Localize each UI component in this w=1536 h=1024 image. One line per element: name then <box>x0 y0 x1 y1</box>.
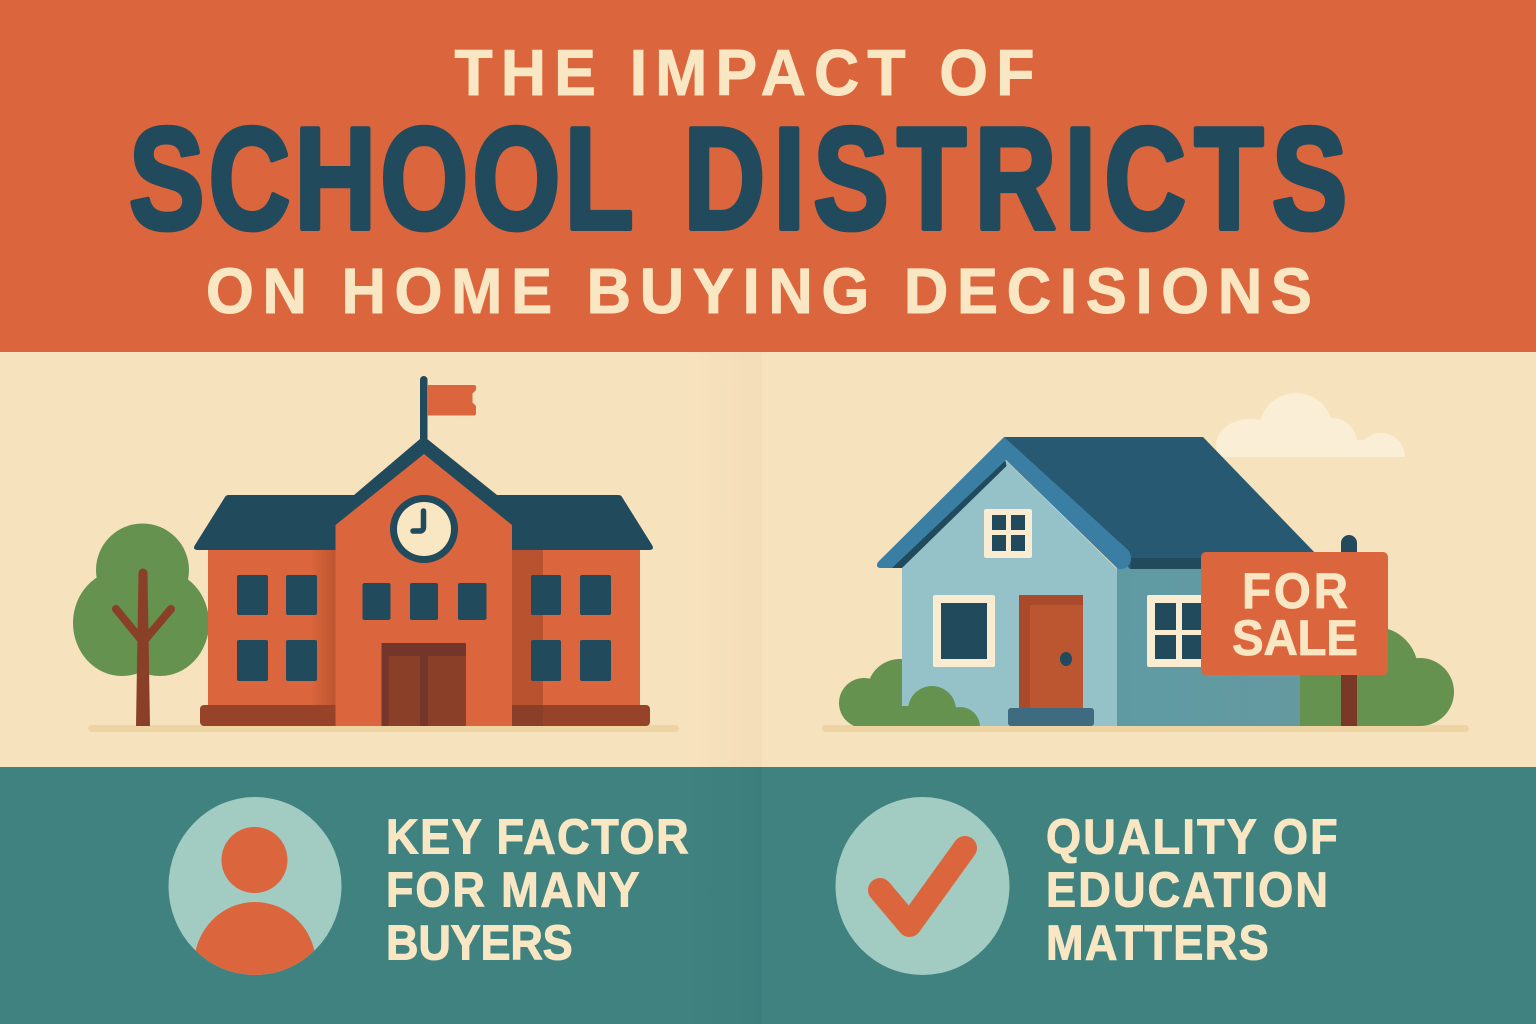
cloud <box>1216 393 1405 457</box>
side wall <box>1117 560 1300 726</box>
back bushes <box>839 627 1454 728</box>
base <box>200 705 650 726</box>
left window <box>933 595 995 667</box>
header band <box>0 0 1536 352</box>
illustration: school <box>73 376 679 732</box>
gable trim <box>877 437 1131 569</box>
windows <box>237 575 611 681</box>
flag <box>420 376 476 442</box>
sign post <box>1341 535 1357 726</box>
caption: quality of education <box>1046 809 1338 970</box>
clock <box>390 495 458 563</box>
icon: person <box>168 797 342 975</box>
caption: key factor: KEY FACTOR <box>386 809 689 864</box>
house door <box>1019 595 1083 708</box>
front bushes <box>902 686 980 726</box>
footer band <box>0 767 1536 1024</box>
for sale sign: SALE <box>1232 611 1358 666</box>
eave shadow <box>891 458 1006 568</box>
title line 2 <box>129 97 1347 260</box>
caption: quality of education: QUALITY OF <box>1046 809 1338 864</box>
main roof <box>1004 437 1318 569</box>
title line 2: SCHOOL <box>129 97 634 260</box>
tree <box>73 524 209 726</box>
title line 2: DISTRICTS <box>684 97 1347 260</box>
roof shadow <box>1131 558 1211 569</box>
attic window <box>984 509 1032 558</box>
caption: key factor: BUYERS <box>386 915 573 970</box>
for sale sign <box>1201 552 1388 675</box>
ground line <box>822 725 1469 732</box>
icon: check mark <box>836 797 1010 975</box>
caption: key factor: FOR MANY <box>386 862 639 917</box>
front wall <box>902 461 1117 726</box>
left wing <box>208 545 338 710</box>
caption: key factor <box>386 809 689 970</box>
roof <box>194 436 653 550</box>
caption: quality of education: EDUCATION <box>1046 862 1328 917</box>
right wing <box>510 545 640 710</box>
school door <box>382 643 466 726</box>
illustration: house <box>822 393 1469 747</box>
for sale sign: FOR <box>1242 564 1348 619</box>
right window <box>1147 595 1207 667</box>
illustration band <box>0 352 1536 767</box>
door step <box>1008 708 1094 726</box>
caption: quality of education: MATTERS <box>1046 915 1269 970</box>
title line 3: ON HOME BUYING DECISIONS <box>206 256 1312 327</box>
title line 1: THE IMPACT OF <box>454 36 1034 109</box>
title <box>129 36 1347 327</box>
ground line <box>88 725 679 732</box>
central block <box>336 454 512 726</box>
